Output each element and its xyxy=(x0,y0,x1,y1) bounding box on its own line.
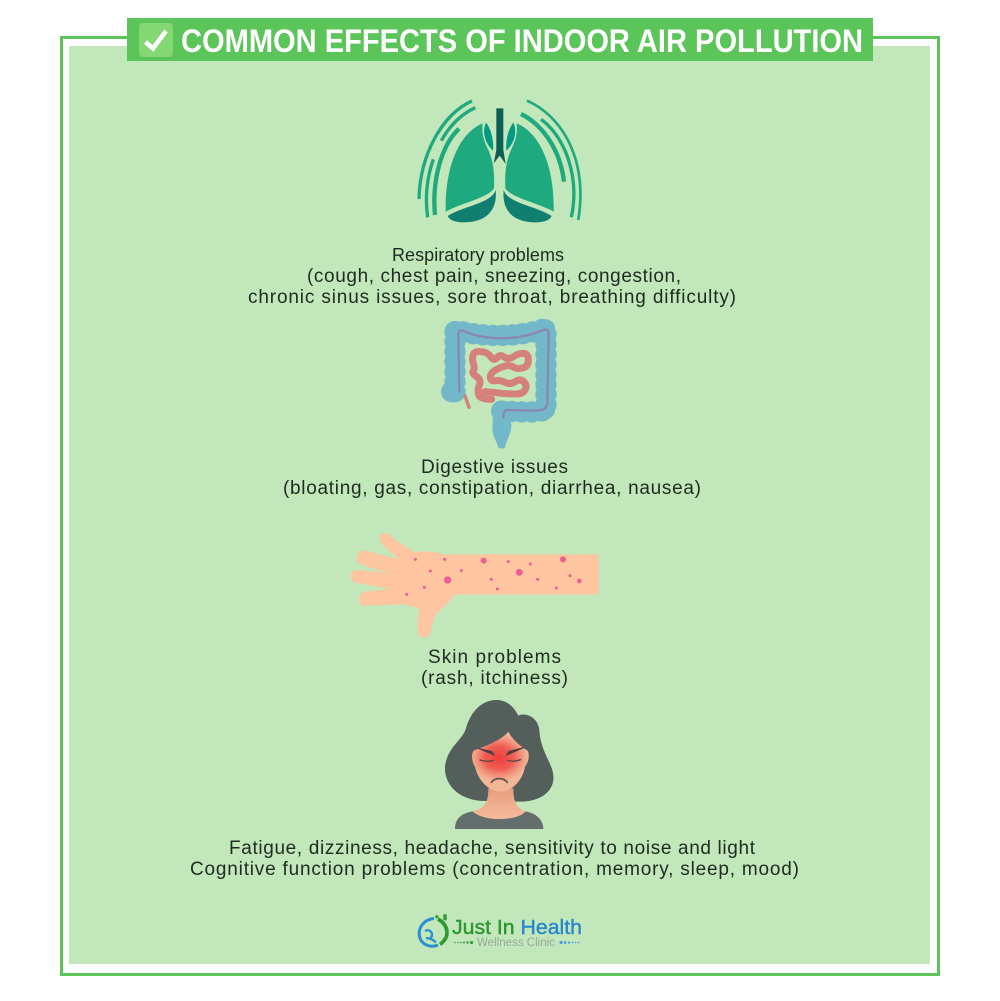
banner background xyxy=(127,18,873,61)
text: skin problems: (rash, itchiness) xyxy=(421,668,568,689)
text: digestive issues xyxy=(283,457,701,499)
logo dots xyxy=(454,941,579,944)
text: fatigue and cognitive problems: Fatigue, dizziness, headache, sensitivity to noise and light xyxy=(229,838,756,859)
icon: intestines xyxy=(441,328,549,448)
title banner xyxy=(127,18,873,61)
icon: arm with rash xyxy=(351,533,598,638)
title: COMMON EFFECTS OF INDOOR AIR POLLUTION xyxy=(181,23,863,59)
text: digestive issues: (bloating, gas, constipation, diarrhea, nausea) xyxy=(283,478,701,499)
text: respiratory problems: chronic sinus issues, sore throat, breathing difficulty) xyxy=(248,287,736,308)
section: respiratory problems xyxy=(248,101,736,308)
background panel xyxy=(69,46,930,964)
logo tagline: Wellness Clinic xyxy=(477,937,555,949)
icon: check mark xyxy=(139,23,173,57)
text: skin problems: Skin problems xyxy=(428,647,561,668)
text: skin problems xyxy=(421,647,568,689)
text: fatigue and cognitive problems: Cognitive function problems (concentration, memory, sleep, mood) xyxy=(190,859,799,880)
text: respiratory problems: Respiratory problems xyxy=(392,245,564,265)
logo: Just In Health Wellness Clinic xyxy=(419,914,582,949)
icon: lungs xyxy=(419,101,580,222)
text: fatigue and cognitive problems xyxy=(190,838,799,880)
section: fatigue and cognitive problems xyxy=(190,700,799,880)
text: digestive issues: Digestive issues xyxy=(421,457,568,478)
section: digestive issues xyxy=(283,328,701,499)
icon: woman with headache xyxy=(445,700,553,829)
text: respiratory problems xyxy=(248,245,736,308)
logo wordmark: Just In Health xyxy=(452,917,582,939)
text: respiratory problems: (cough, chest pain, sneezing, congestion, xyxy=(307,266,681,287)
logo icon xyxy=(419,914,447,946)
section: skin problems xyxy=(351,533,598,689)
